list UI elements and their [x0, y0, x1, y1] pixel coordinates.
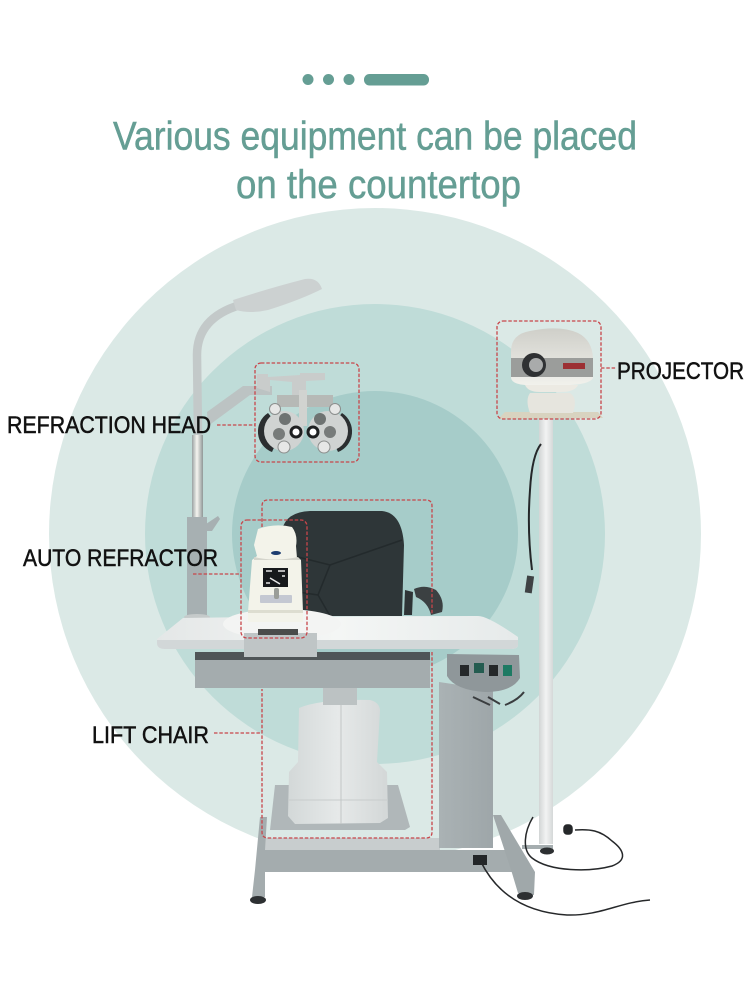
- title: Various equipment can be placed: [113, 114, 637, 158]
- callout: lift chair box: [262, 500, 432, 838]
- label: refraction head: REFRACTION HEAD: [7, 412, 211, 439]
- callout: refraction head box: [255, 363, 359, 462]
- callout: projector box: [497, 321, 601, 419]
- instrument turntable and slider: [223, 609, 341, 657]
- red dashed callout boxes and leaders: [193, 321, 616, 838]
- table column and base frame: [250, 682, 535, 904]
- table drawer and chair lift: [195, 652, 430, 830]
- label: lift chair: LIFT CHAIR: [92, 722, 209, 749]
- power cables: [481, 817, 650, 915]
- projector: [511, 328, 593, 413]
- control panel: [447, 654, 524, 705]
- background concentric circles: [49, 208, 701, 860]
- refraction head instrument: [257, 373, 352, 453]
- tabletop: [157, 616, 518, 649]
- header dots and pill: [302, 74, 429, 86]
- label: auto refractor: AUTO REFRACTOR: [23, 545, 218, 572]
- callout: auto refractor box: [241, 520, 307, 638]
- auto refractor: [248, 525, 303, 635]
- projector pole and shelf: [498, 412, 603, 854]
- lamp: [184, 279, 322, 620]
- title: [113, 114, 637, 207]
- chair: [282, 511, 443, 616]
- leader lines: [193, 368, 616, 733]
- title: on the countertop: [236, 163, 521, 207]
